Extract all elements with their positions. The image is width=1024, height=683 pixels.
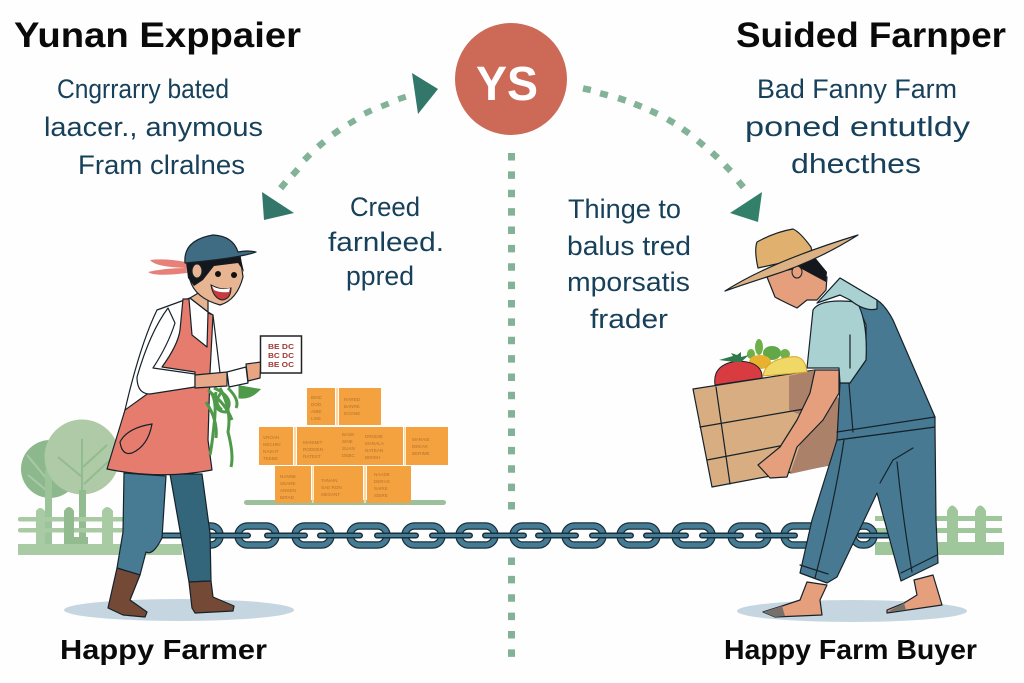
stacked orange boxes — [244, 388, 448, 505]
figure: happy farm buyer — [693, 229, 942, 617]
text block: centre left — [328, 192, 444, 291]
buyer crate — [693, 370, 845, 487]
text block: centre right — [567, 194, 691, 334]
arrow: dotted left arc — [262, 73, 438, 220]
text block: left description: Cngrrarry bated — [57, 74, 229, 104]
stacked orange boxes: NASHT — [263, 449, 279, 454]
stacked orange boxes: MANALA — [365, 441, 385, 446]
stacked orange boxes: NANNE — [280, 474, 296, 479]
buyer feet — [763, 575, 942, 617]
versus badge: YS — [476, 58, 538, 111]
buyer vegetables — [715, 339, 807, 385]
scene: left trees and fence — [18, 420, 182, 555]
stacked orange boxes: NATEAN — [365, 448, 383, 453]
farmer card: BE DC — [268, 344, 294, 351]
stacked orange boxes: BANRE — [344, 404, 360, 409]
farmer sleeve and arm — [137, 308, 261, 394]
stacked orange boxes: SUAN — [342, 446, 355, 451]
stacked orange boxes: SIERE — [374, 493, 388, 498]
caption: happy farm buyer: Happy Farm Buyer — [724, 634, 977, 665]
ground shadow: left — [64, 599, 294, 621]
stacked orange boxes: ANSEN — [280, 488, 296, 493]
text block: centre left: ppred — [346, 261, 414, 291]
stacked orange boxes: SAE RON — [321, 485, 342, 490]
stacked orange boxes: BINC — [311, 395, 323, 400]
stacked orange boxes: TANAIN — [321, 478, 338, 483]
buyer hat — [725, 229, 858, 291]
stacked orange boxes: DEBC — [342, 453, 355, 458]
stacked orange boxes: BASE — [342, 432, 354, 437]
farmer card — [260, 336, 302, 373]
farmer card: BE OC — [268, 362, 294, 369]
title: right: Suided Farnper — [736, 16, 1006, 55]
text block: centre right: frader — [590, 304, 668, 334]
farmer head — [148, 235, 256, 312]
stacked orange boxes: DRODIE — [365, 434, 383, 439]
stacked orange boxes: MESANT — [321, 492, 340, 497]
farmer boots — [108, 568, 234, 617]
buyer head — [767, 255, 827, 308]
versus badge — [455, 23, 567, 135]
scene: right fence — [875, 506, 1004, 555]
stacked orange boxes: TEEBE — [263, 456, 278, 461]
farmer shirt — [125, 298, 220, 410]
title: left: Yunan Exppaier — [14, 16, 301, 55]
text block: left description — [44, 74, 263, 180]
stacked orange boxes: BERIME — [412, 451, 430, 456]
text block: centre right: Thinge to — [568, 194, 681, 224]
buyer trousers — [800, 427, 938, 583]
stacked orange boxes: DOANE — [344, 411, 360, 416]
text block: centre left: Creed — [350, 192, 420, 222]
stacked orange boxes: BIRAD — [280, 495, 295, 500]
buyer overalls — [820, 278, 935, 440]
stacked orange boxes: RARED — [344, 397, 361, 402]
text block: right description: poned entutldy — [745, 111, 970, 142]
farmer apron — [107, 299, 213, 475]
stacked orange boxes: SINE — [342, 439, 353, 444]
figure: happy farmer — [107, 235, 302, 617]
stacked orange boxes: VROAN — [263, 435, 279, 440]
text block: right description — [745, 74, 970, 179]
caption: happy farmer: Happy Farmer — [60, 634, 267, 665]
stacked orange boxes: RODDEN — [303, 447, 323, 452]
stacked orange boxes: DOD — [311, 402, 322, 407]
text block: right description: dhecthes — [791, 148, 921, 179]
buyer overalls waist line — [837, 384, 935, 432]
stacked orange boxes: MANIMIT — [303, 440, 323, 445]
stacked orange boxes: MARAIE — [412, 437, 430, 442]
stacked orange boxes: SAIRE — [374, 486, 388, 491]
text block: centre right: mporsatis — [567, 267, 690, 297]
ground shadow: right — [737, 600, 967, 622]
stacked orange boxes: NECHIN — [263, 442, 281, 447]
stacked orange boxes: DERAS — [374, 479, 390, 484]
arrow: dotted right arc — [582, 85, 762, 222]
stacked orange boxes: NAADE — [374, 472, 390, 477]
buyer shirt — [807, 278, 877, 383]
text block: centre right: balus tred — [567, 231, 691, 261]
buyer trouser creases — [800, 440, 937, 578]
farmer beans — [206, 387, 258, 467]
text block: right description: Bad Fanny Farm — [757, 74, 957, 104]
centre dotted divider — [508, 153, 515, 658]
stacked orange boxes: AIBE — [311, 409, 321, 414]
buyer arm — [758, 370, 839, 478]
stacked orange boxes: RATEST — [303, 454, 321, 459]
farmer legs — [117, 473, 211, 582]
text block: left description: laacer., anymous — [44, 112, 263, 142]
chain — [160, 526, 888, 545]
stacked orange boxes: BIRISH — [365, 455, 380, 460]
stacked orange boxes: SEARE — [280, 481, 296, 486]
text block: left description: Fram clralnes — [78, 150, 245, 180]
farmer card: BC DC — [268, 353, 294, 360]
stacked orange boxes: LISE — [311, 416, 321, 421]
stacked orange boxes: DEKAR — [412, 444, 429, 449]
text block: centre left: farnleed. — [328, 227, 444, 257]
